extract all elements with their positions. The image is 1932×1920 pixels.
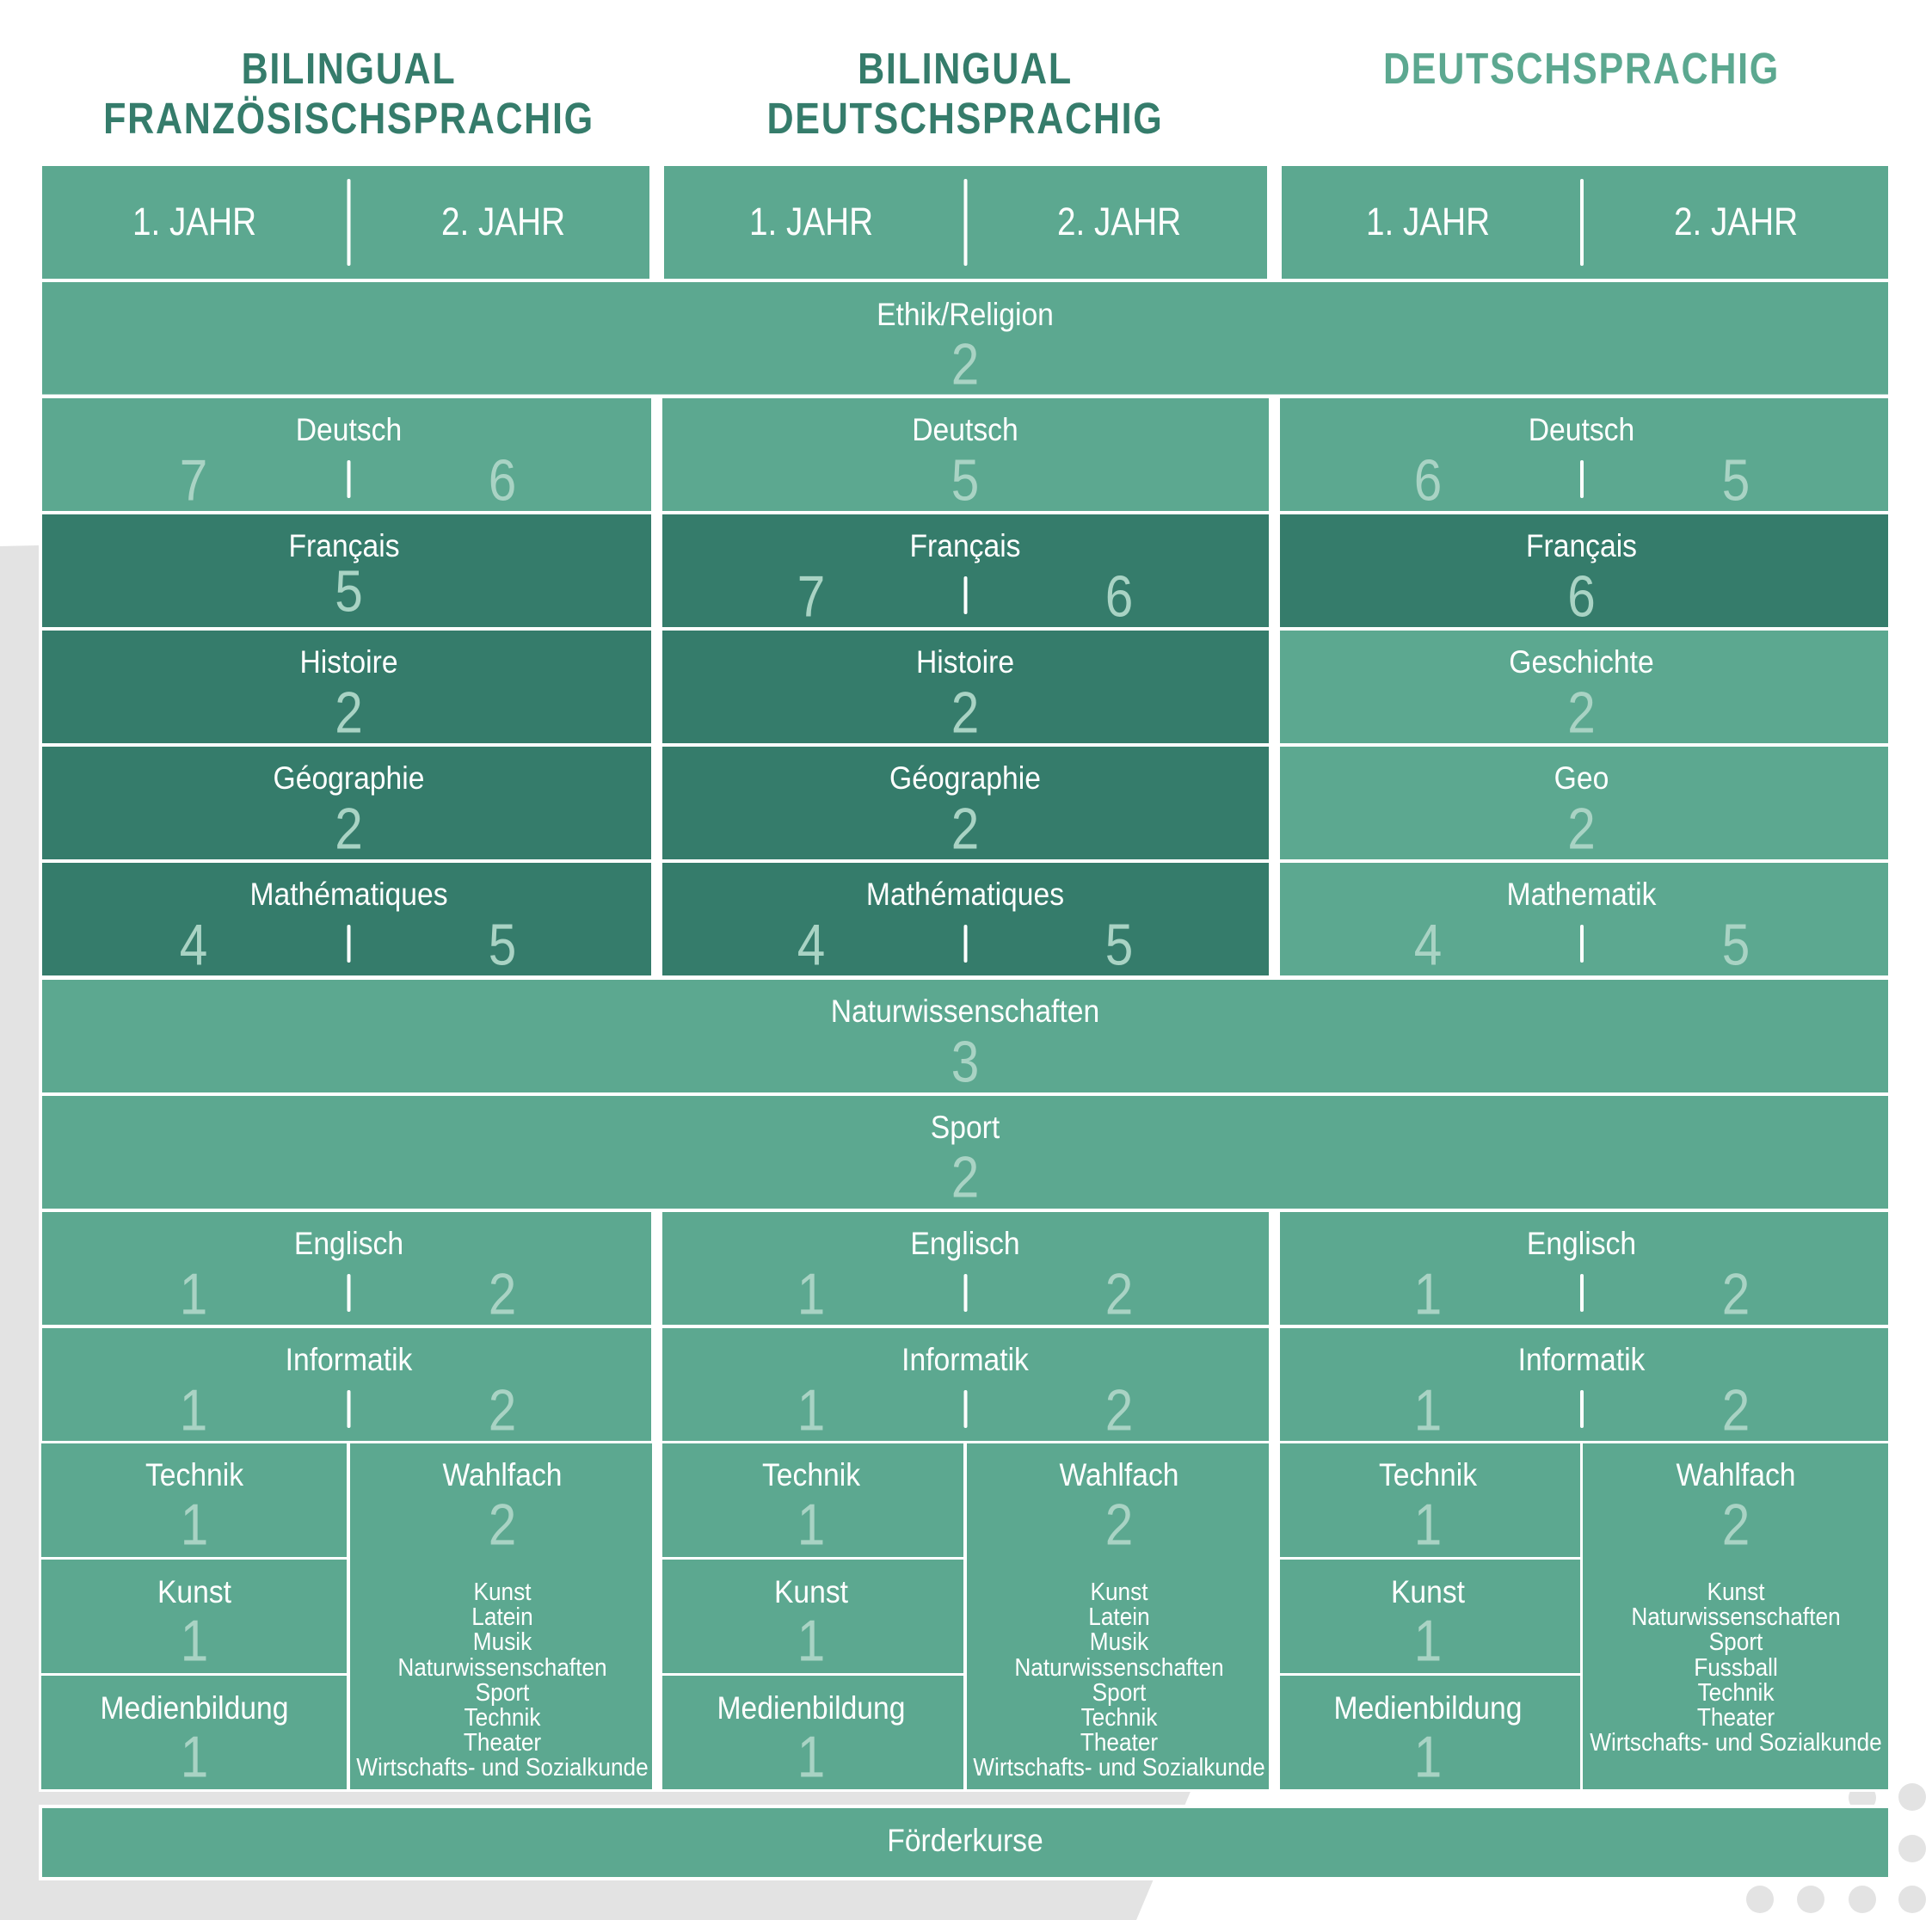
cell: Englisch column 1: 1: [180, 1262, 207, 1327]
cell: Medienbildung: [662, 1676, 963, 1790]
cell: Wahlfach: Fussball: [1694, 1653, 1778, 1681]
cell: Français column 2: 6: [1105, 564, 1133, 630]
cell: Français column 1: 5: [335, 559, 363, 625]
row: Förderkurse: Förderkurse: [887, 1824, 1043, 1858]
cell: Kunst: [662, 1560, 963, 1674]
cell: Englisch column 2: Englisch: [910, 1227, 1020, 1261]
cell: Technik: Technik: [1379, 1458, 1477, 1492]
cell: Mathematik column 3: [1280, 863, 1888, 978]
cell: Informatik column 3: [1280, 1328, 1888, 1443]
cell: Wahlfach: Wahlfach: [1059, 1458, 1179, 1492]
cell: Histoire column 1: 2: [335, 680, 363, 746]
cell: Deutsch column 1: [42, 398, 651, 514]
cell: Wahlfach: 2: [489, 1492, 516, 1558]
cell: Wahlfach: [1583, 1443, 1888, 1789]
row: Sport: Sport: [931, 1111, 1000, 1145]
cell: Wahlfach: Wirtschafts- und Sozialkunde: [973, 1753, 1265, 1781]
cell: Wahlfach: Latein: [1088, 1603, 1150, 1630]
title: Bilingual französischsprachig: FRANZÖSISCHSPRACHIG: [103, 95, 594, 144]
cell: Englisch column 1: Englisch: [294, 1227, 403, 1261]
cell: Mathématiques column 1: Mathématiques: [249, 877, 448, 912]
cell: Kunst: Kunst: [1391, 1575, 1465, 1609]
row: Ethik/Religion: [42, 282, 1888, 397]
cell: Français column 2: Français: [909, 529, 1021, 563]
row: Naturwissenschaften: [42, 980, 1888, 1095]
title: Bilingual französischsprachig: BILINGUAL: [242, 45, 456, 94]
cell: Englisch column 3: 2: [1722, 1262, 1750, 1327]
cell: Wahlfach: Naturwissenschaften: [1014, 1653, 1224, 1681]
cell: Deutsch column 2: 5: [951, 448, 979, 514]
cell: Français column 1: Français: [288, 529, 400, 563]
row: Förderkurse: [42, 1808, 1888, 1877]
row: Informatik: [42, 1328, 1888, 1443]
cell: Englisch column 1: 2: [489, 1262, 516, 1327]
cell: Geo column 3: [1280, 747, 1888, 862]
row: Naturwissenschaften: 3: [951, 1030, 979, 1095]
cell: Kunst: Kunst: [774, 1575, 848, 1609]
cell: Informatik column 3: 2: [1722, 1378, 1750, 1443]
decorative dots: [1746, 1783, 1926, 1913]
cell: Englisch column 2: 2: [1105, 1262, 1133, 1327]
cell: Géographie column 2: 2: [951, 797, 979, 862]
cell: Kunst: [41, 1560, 347, 1674]
cell: Geschichte column 3: 2: [1567, 680, 1596, 746]
cell: Kunst: Kunst: [157, 1575, 231, 1609]
cell: Deutsch column 3: 5: [1722, 448, 1750, 514]
row: Deutsch: [42, 398, 1888, 514]
cell: Mathématiques column 2: [662, 863, 1269, 978]
cell: Wahlfach: Theater: [1080, 1728, 1158, 1756]
cell: Français column 2: [662, 514, 1269, 630]
cell: Histoire column 2: 2: [951, 680, 979, 746]
header: years column 1: [42, 166, 649, 279]
cell: Technik: 1: [1414, 1492, 1442, 1558]
cell: Mathematik column 3: Mathematik: [1507, 877, 1657, 912]
cell: Technik: Technik: [145, 1458, 243, 1492]
cell: Medienbildung: Medienbildung: [717, 1691, 905, 1726]
cell: Informatik column 2: 2: [1105, 1378, 1133, 1443]
cell: Geschichte column 3: [1280, 631, 1888, 746]
cell: Géographie column 2: [662, 747, 1269, 862]
cell: Wahlfach: Technik: [1081, 1703, 1158, 1731]
cell: Deutsch column 3: 6: [1414, 448, 1442, 514]
header: years column 2: 2. JAHR: [1057, 200, 1181, 243]
cell: Géographie column 1: Géographie: [274, 761, 424, 796]
block: small subjects column 3: [1280, 1443, 1888, 1790]
cell: Wahlfach: Naturwissenschaften: [1631, 1603, 1841, 1630]
row: Français: [42, 514, 1888, 630]
cell: Wahlfach: [350, 1443, 652, 1789]
cell: Wahlfach: Sport: [1709, 1628, 1763, 1655]
row: Mathématiques / Mathematik: [42, 863, 1888, 978]
cell: Medienbildung: 1: [181, 1725, 208, 1790]
title: Bilingual deutschsprachig: DEUTSCHSPRACHIG: [766, 95, 1164, 144]
cell: Deutsch column 1: 7: [180, 448, 207, 514]
header: years column 1: 2. JAHR: [441, 200, 565, 243]
cell: Informatik column 1: [42, 1328, 651, 1443]
cell: Informatik column 1: 2: [489, 1378, 516, 1443]
cell: Medienbildung: Medienbildung: [101, 1691, 288, 1726]
cell: Français column 3: Français: [1526, 529, 1637, 563]
title: Deutschsprachig: DEUTSCHSPRACHIG: [1383, 45, 1780, 94]
cell: Medienbildung: Medienbildung: [1334, 1691, 1522, 1726]
cell: Histoire column 1: Histoire: [299, 645, 398, 680]
cell: Wahlfach: 2: [1722, 1492, 1750, 1558]
cell: Mathématiques column 2: 4: [797, 913, 825, 978]
row: Ethik/Religion: 2: [951, 332, 979, 397]
cell: Wahlfach: Naturwissenschaften: [397, 1653, 607, 1681]
cell: Informatik column 3: 1: [1414, 1378, 1442, 1443]
cell: Géographie column 1: [42, 747, 651, 862]
cell: Wahlfach: Wirtschafts- und Sozialkunde: [1590, 1728, 1882, 1756]
block: small subjects column 1: [41, 1443, 652, 1790]
row: Sport: 2: [951, 1145, 979, 1210]
title: Bilingual deutschsprachig: BILINGUAL: [858, 45, 1073, 94]
cell: Englisch column 3: [1280, 1212, 1888, 1327]
cell: Technik: [1280, 1443, 1580, 1558]
cell: Wahlfach: Latein: [471, 1603, 533, 1630]
cell: Histoire column 1: [42, 631, 651, 746]
cell: Wahlfach: Sport: [476, 1678, 530, 1706]
cell: Geo column 3: 2: [1567, 797, 1596, 862]
cell: Français column 1: [42, 514, 651, 627]
cell: Informatik column 2: 1: [797, 1378, 825, 1443]
cell: Wahlfach: Wahlfach: [442, 1458, 563, 1492]
cell: Géographie column 1: 2: [335, 797, 363, 862]
cell: Deutsch column 3: [1280, 398, 1888, 514]
cell: Informatik column 1: 1: [180, 1378, 207, 1443]
row: Sport: [42, 1096, 1888, 1210]
cell: Mathematik column 3: 5: [1722, 913, 1750, 978]
row: Histoire / Geschichte: [42, 631, 1888, 746]
cell: Wahlfach: Theater: [464, 1728, 541, 1756]
cell: Deutsch column 1: Deutsch: [296, 413, 402, 447]
cell: Wahlfach: Technik: [1698, 1678, 1775, 1706]
header: years column 3: [1282, 166, 1888, 279]
cell: Wahlfach: Kunst: [473, 1578, 532, 1605]
cell: Geschichte column 3: Geschichte: [1509, 645, 1654, 680]
cell: Wahlfach: Musik: [473, 1628, 532, 1655]
cell: Mathématiques column 2: Mathématiques: [866, 877, 1064, 912]
header: years column 3: 2. JAHR: [1674, 200, 1798, 243]
cell: Français column 2: 7: [797, 564, 825, 630]
cell: Deutsch column 3: Deutsch: [1529, 413, 1634, 447]
cell: Wahlfach: Sport: [1092, 1678, 1147, 1706]
block: small subjects column 2: [662, 1443, 1269, 1790]
row: Géographie / Geo: [42, 747, 1888, 862]
cell: Kunst: [1280, 1560, 1580, 1674]
cell: Wahlfach: Wahlfach: [1676, 1458, 1796, 1492]
cell: Medienbildung: [1280, 1676, 1580, 1790]
cell: Technik: 1: [181, 1492, 208, 1558]
cell: Wahlfach: Kunst: [1090, 1578, 1148, 1605]
row: Englisch: [42, 1212, 1888, 1327]
cell: Deutsch column 2: [662, 398, 1269, 514]
cell: Englisch column 3: 1: [1414, 1262, 1442, 1327]
cell: Englisch column 2: [662, 1212, 1269, 1327]
cell: Technik: [41, 1443, 347, 1558]
cell: Wahlfach: Theater: [1697, 1703, 1775, 1731]
cell: Informatik column 2: Informatik: [901, 1343, 1029, 1377]
cell: Englisch column 2: 1: [797, 1262, 825, 1327]
cell: Englisch column 1: [42, 1212, 651, 1327]
header: years column 2: [664, 166, 1267, 279]
cell: Deutsch column 1: 6: [489, 448, 516, 514]
cell: Kunst: 1: [797, 1609, 825, 1674]
cell: Informatik column 2: [662, 1328, 1269, 1443]
cell: Wahlfach: Technik: [465, 1703, 541, 1731]
cell: Wahlfach: Musik: [1090, 1628, 1149, 1655]
cell: Mathématiques column 2: 5: [1105, 913, 1133, 978]
cell: Histoire column 2: [662, 631, 1269, 746]
cell: Deutsch column 2: Deutsch: [912, 413, 1018, 447]
cell: Medienbildung: [41, 1676, 347, 1790]
cell: Wahlfach: [967, 1443, 1269, 1789]
cell: Mathématiques column 1: 4: [180, 913, 207, 978]
cell: Informatik column 1: Informatik: [286, 1343, 413, 1377]
cell: Mathématiques column 1: 5: [489, 913, 516, 978]
cell: Technik: Technik: [762, 1458, 860, 1492]
row: Naturwissenschaften: Naturwissenschaften: [831, 994, 1099, 1029]
cell: Technik: [662, 1443, 963, 1558]
cell: Mathématiques column 1: [42, 863, 651, 978]
cell: Englisch column 3: Englisch: [1527, 1227, 1636, 1261]
cell: Wahlfach: Kunst: [1707, 1578, 1765, 1605]
cell: Technik: 1: [797, 1492, 825, 1558]
cell: Kunst: 1: [181, 1609, 208, 1674]
header: years column 1: 1. JAHR: [132, 200, 256, 243]
background: grey slanted shape: [0, 545, 1206, 1920]
cell: Français column 3: 6: [1567, 564, 1596, 630]
header: years column 2: 1. JAHR: [749, 200, 873, 243]
cell: Wahlfach: 2: [1105, 1492, 1133, 1558]
cell: Mathematik column 3: 4: [1414, 913, 1442, 978]
cell: Medienbildung: 1: [1414, 1725, 1442, 1790]
cell: Français column 3: [1280, 514, 1888, 630]
cell: Géographie column 2: Géographie: [889, 761, 1041, 796]
cell: Wahlfach: Wirtschafts- und Sozialkunde: [356, 1753, 649, 1781]
cell: Geo column 3: Geo: [1554, 761, 1609, 796]
cell: Informatik column 3: Informatik: [1518, 1343, 1646, 1377]
header: years column 3: 1. JAHR: [1366, 200, 1490, 243]
row: Ethik/Religion: Ethik/Religion: [877, 298, 1054, 332]
cell: Medienbildung: 1: [797, 1725, 825, 1790]
cell: Kunst: 1: [1414, 1609, 1442, 1674]
cell: Histoire column 2: Histoire: [916, 645, 1014, 680]
